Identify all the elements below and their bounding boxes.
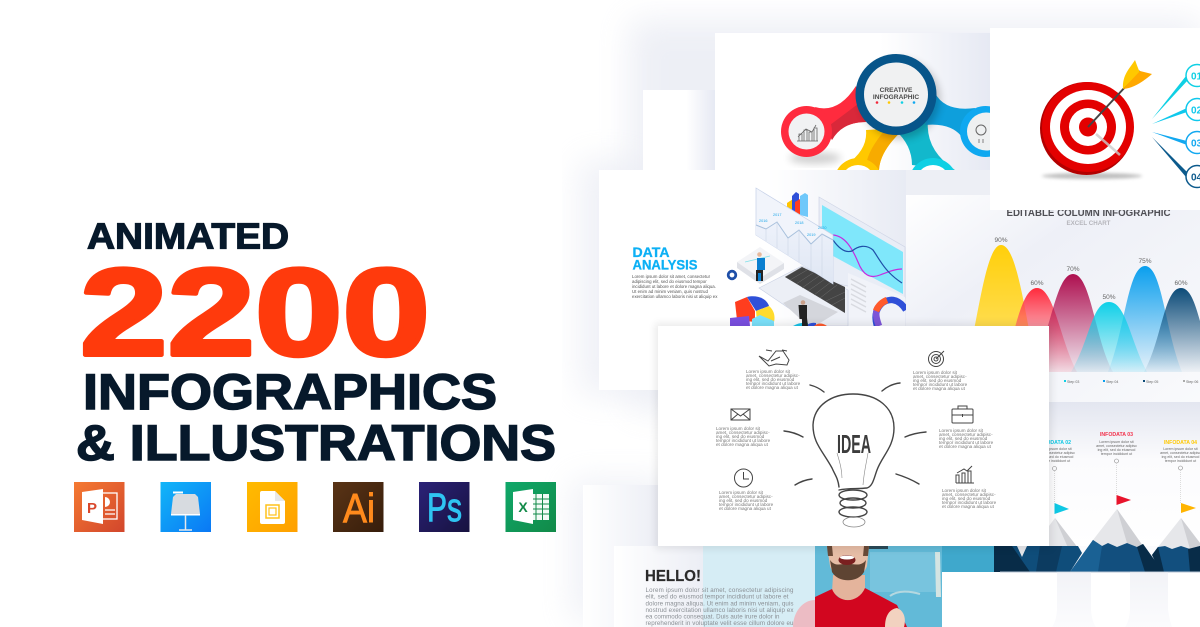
panel: creative infographic [715,33,990,170]
hello paragraph: elit, sed do eiusmod tempor incididunt ut labore et [646,594,789,601]
infodata 03: ing elit, sed do eiusmod [1098,448,1135,452]
infodata 04: tempor incididunt ut [1165,459,1196,463]
data analysis text: Ut enim ad minim veniam, quis nostrud [632,289,708,294]
infodata 04: ing elit, sed do eiusmod [1162,455,1199,459]
data analysis heading: ANALYSIS [632,258,698,272]
text block: top right: tempor incididunt ut labore [913,382,968,387]
text block: top right: et dolore magna aliqua ut [913,386,966,391]
icon: handshake [759,350,789,366]
laptop and keyboard [759,266,848,326]
text block: middle right: tempor incididunt ut labore [939,440,994,445]
panel: idea lightbulb [655,323,1052,549]
icon: target [928,351,944,366]
isometric illustration [728,188,906,326]
data analysis text: Lorem ipsum dolor sit amet, consectetur [632,274,711,279]
chart: bell columns: 50% [1102,294,1116,301]
bar blocks [787,192,808,218]
text block: top left: tempor incididunt ut labore [746,381,801,386]
text block: top left: ing elit, sed do eiusmod [746,377,795,382]
infodata 04 [1160,440,1200,513]
lightbulb drawing [813,394,894,527]
text block: top left [746,369,801,390]
infodata 03: Lorem ipsum dolor sit [1099,440,1134,444]
lightbulb drawing: IDEA [837,429,871,459]
yellow arm [837,130,898,170]
text block: bottom right: amet, consectetur adipisc- [942,492,996,497]
infodata 03: amet, consectetur adipisc [1096,444,1137,448]
infodata 02 [1034,440,1075,514]
translucent overlay [703,546,815,627]
infodata 03: tempor incididunt ut [1101,452,1132,456]
text block: bottom left: tempor incididunt ut labore [719,502,774,507]
chart: bell columns: 90% [994,237,1008,244]
chart legend: Step 05 [1146,380,1158,384]
person standing [798,300,808,326]
icon: envelope [731,409,750,420]
center circle [856,54,940,139]
hello paragraph: nostrud exercitation ullamco laboris nisi ut aliquip ex [646,607,794,614]
icon: briefcase [952,406,973,423]
data analysis text: exercitation ullamco laboris nisi ut aliquip ex [632,294,718,299]
front chart panel: 2020 [818,226,826,230]
text block: middle right: ing elit, sed do eiusmod [939,436,988,441]
small pie bottom [793,323,827,326]
text block: bottom right: Lorem ipsum dolor sit [942,488,987,493]
panel: data analysis lower part [599,326,661,390]
front chart panel: 2018 [795,221,803,225]
red arm and node [781,86,866,164]
icon: illustrator: Ai [343,485,375,531]
gear icon [728,271,736,279]
text block: middle left: tempor incididunt ut labore [716,438,771,443]
text block: bottom left: ing elit, sed do eiusmod [719,498,768,503]
data analysis text: adipiscing elit, sed do eiusmod tempor [632,279,707,284]
infodata 03: INFODATA 03 [1100,432,1133,438]
infodata 03 [1096,432,1137,505]
title: 2200: 2200 [80,244,430,382]
chart legend: Step 04 [1106,380,1118,384]
infodata 04: Lorem ipsum dolor sit [1163,447,1198,451]
donut chart [876,300,906,326]
text block: top right [913,370,968,391]
icon: clock [734,469,752,487]
hello paragraph: dolore magna aliqua. Ut enim ad minim veniam, quis [646,600,794,607]
text block: top right: amet, consectetur adipisc- [913,374,967,379]
mountain range [994,509,1200,572]
text block: bottom left [719,490,774,511]
text block: bottom left: et dolore magna aliqua ut [719,506,772,511]
blue arm and node [925,95,990,157]
data analysis text: incididunt ut labore et dolore magna aliqua. [632,284,716,289]
infodata 02: tempor incididunt ut [1039,459,1070,463]
hello paragraph: ea commodo consequat. Duis aute irure dolor in [646,614,780,621]
text block: middle right: amet, consectetur adipisc- [939,432,993,437]
back screen [819,197,905,298]
right side document [848,278,905,323]
hello paragraph: Lorem ipsum dolor sit amet, consectetur adipiscing [646,587,794,594]
icon: photoshop: Ps [427,486,462,530]
text block: middle left: amet, consectetur adipisc- [716,430,770,435]
icon: illustrator [333,482,384,532]
icon: powerpoint: P [87,500,97,517]
chart legend: Step 03 [1067,380,1079,384]
chart legend: Step 06 [1186,380,1198,384]
panel: mountains [994,402,1200,627]
text block: top left: et dolore magna aliqua ut [746,385,799,390]
icon: powerpoint [74,482,124,532]
data analysis heading [632,247,698,270]
text block: middle right [939,428,994,449]
text block: middle left: et dolore magna aliqua ut [716,442,769,447]
title: and illustrations: & ILLUSTRATIONS [76,415,556,471]
chart: bell columns: 60% [1174,280,1188,287]
data analysis heading: DATA [632,245,670,260]
text block: top left: amet, consectetur adipisc- [746,373,800,378]
man [815,546,907,627]
text block: middle left [716,426,771,447]
panel: photo hello slide [614,546,994,627]
front chart panel: 2019 [807,233,815,237]
text block: bottom right: tempor incididunt ut labore [942,500,997,505]
target icon [1040,60,1152,179]
panel: target slide [990,28,1200,210]
front chart panel: 2017 [773,213,781,217]
panel background shadows [572,20,1200,620]
text block: middle right: Lorem ipsum dolor sit [939,428,984,433]
panel: left back slide [583,485,659,627]
center circle: CREATIVE [880,87,913,94]
title: infographics: INFOGRAPHICS [83,364,497,420]
infodata 02: ing elit, sed do eiusmod [1036,455,1073,459]
fan connector lines [1152,76,1188,177]
text block: top right: Lorem ipsum dolor sit [913,370,958,375]
infodata 04: INFODATA 04 [1164,440,1197,446]
radiating strokes [784,383,926,485]
numbered badges [1186,64,1200,188]
text block: bottom right: et dolore magna aliqua ut [942,504,995,509]
icon: excel: X [518,499,528,515]
photo of laughing man [703,546,994,627]
icon: keynote [160,482,211,532]
infodata 02: amet, consectetur adipisc [1034,451,1075,455]
chart: bell columns: 75% [1138,258,1152,265]
text block: top right: ing elit, sed do eiusmod [913,378,962,383]
title: animated: ANIMATED [87,216,289,256]
hello paragraph [646,587,794,627]
center circle: INFOGRAPHIC [873,94,919,101]
text block: bottom left: Lorem ipsum dolor sit [719,490,764,495]
icon: photoshop [419,482,470,532]
text block: middle left: Lorem ipsum dolor sit [716,426,761,431]
text block: bottom right [942,488,997,509]
text block: middle right: et dolore magna aliqua ut [939,444,992,449]
panel: data analysis [599,170,906,326]
chart: bell columns: 60% [1030,280,1044,287]
icon: google slides [247,482,298,532]
text block: bottom right: ing elit, sed do eiusmod [942,496,991,501]
chart: bell columns: 70% [1066,266,1080,273]
panel: back slide small [643,90,715,170]
chart legend [1064,380,1198,384]
chart heading: EDITABLE COLUMN INFOGRAPHIC [1006,208,1170,219]
infodata 02: Lorem ipsum dolor sit [1037,447,1072,451]
panel: column chart [906,195,1200,402]
text block: top left: Lorem ipsum dolor sit [746,369,791,374]
infodata 04: amet, consectetur adipisc [1160,451,1200,455]
chart: bell columns [974,238,1200,372]
icon: chart [956,466,974,483]
mountain reflection columns [1052,572,1172,627]
chart heading [1006,208,1170,227]
text block: bottom left: amet, consectetur adipisc- [719,494,773,499]
pie and cube [730,296,774,326]
infodata 02: INFODATA 02 [1038,440,1071,446]
front chart panel [756,188,833,284]
hello paragraph: reprehenderit in voluptate velit esse cillum dolore eu [646,620,794,627]
icon: excel [506,482,556,532]
data analysis text [632,274,718,299]
desk block with person [737,247,784,284]
cyan arm [900,121,955,170]
text block: middle left: ing elit, sed do eiusmod [716,434,765,439]
chart heading: EXCEL CHART [1067,220,1111,227]
hello heading: HELLO! [645,568,701,585]
front chart panel: 2016 [759,219,767,223]
